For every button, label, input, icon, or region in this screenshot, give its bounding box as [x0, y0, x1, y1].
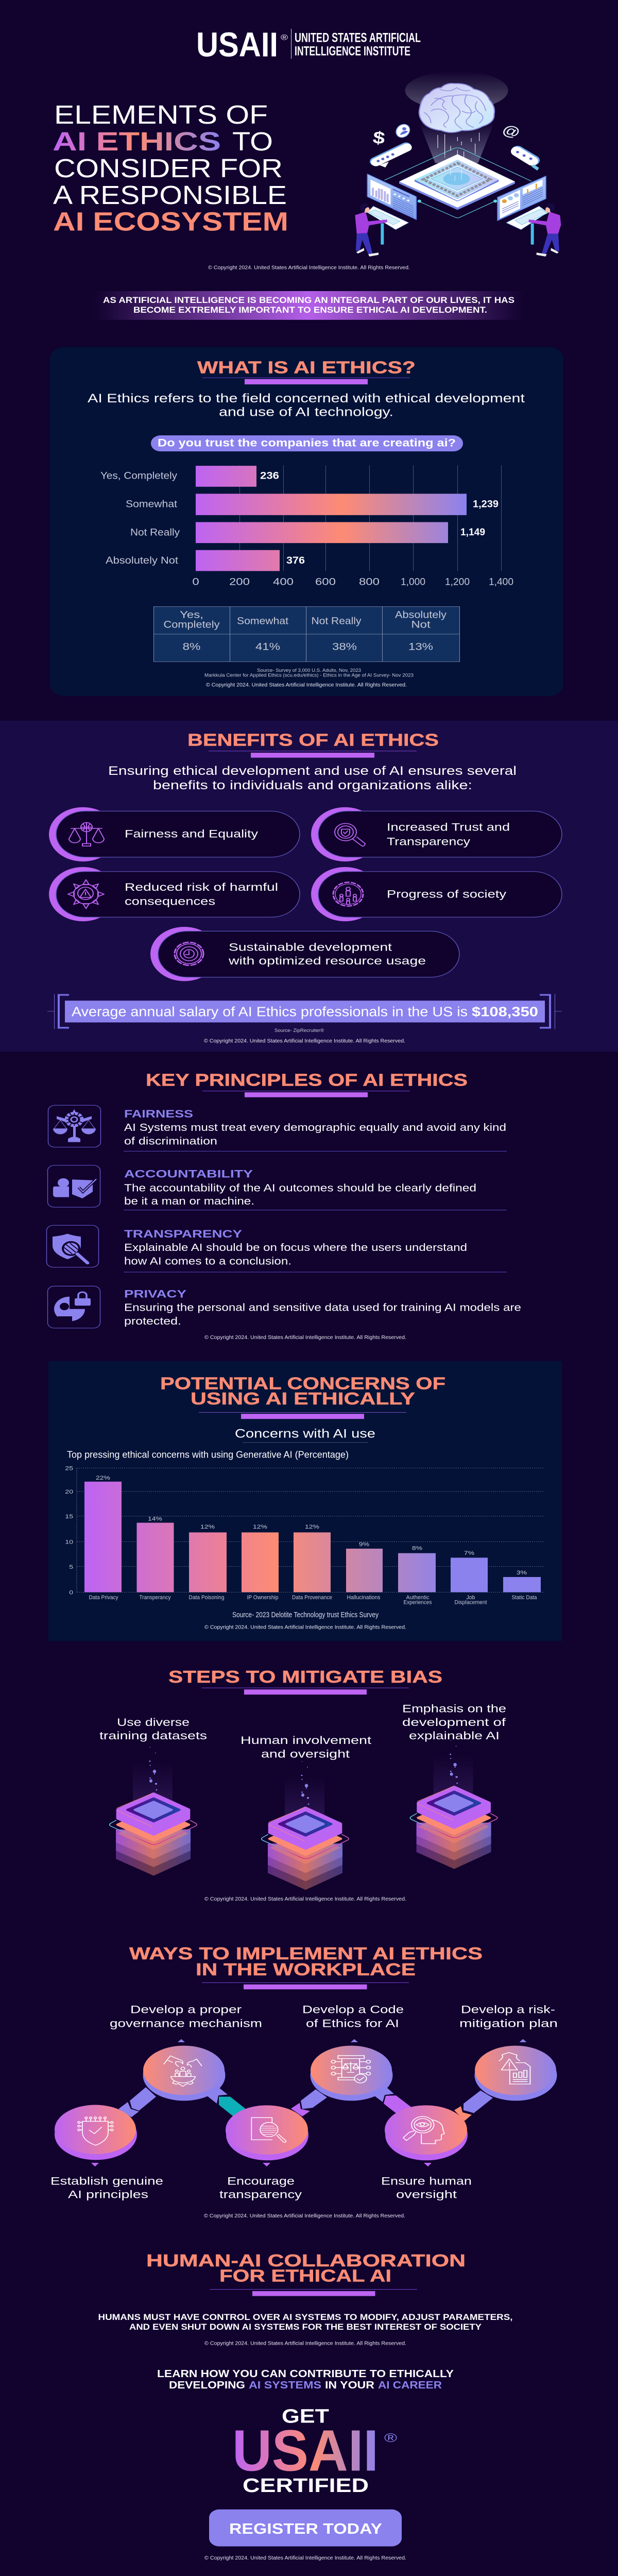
bar chart: Absolutely Not: [106, 554, 178, 566]
card: reduced risk of harmful consequences: consequences: [125, 895, 215, 908]
main title: [53, 100, 288, 236]
column chart: 14%: [148, 1516, 162, 1522]
step: develop a code of ethics for AI: Develop a Code: [302, 2004, 404, 2016]
body text: [98, 2313, 513, 2332]
salary callout: $108,350: [472, 1005, 538, 1020]
copyright: © Copyright 2024. United States Artificial Intelligence Institute. All Rights Reserved.: [204, 2341, 406, 2346]
bar chart: 0: [192, 576, 199, 587]
main title: TO: [232, 127, 273, 157]
step 3: explainable AI: [409, 1730, 500, 1742]
principle: transparency: [46, 1225, 507, 1273]
heading: IN THE WORKPLACE: [196, 1960, 416, 1979]
certification lockup: GET: [282, 2405, 329, 2427]
heading: POTENTIAL CONCERNS OF: [160, 1374, 445, 1393]
copyright: © Copyright 2024. United States Artificial Intelligence Institute. All Rights Reserved.: [204, 1038, 405, 1044]
card: fairness and equality: Fairness and Equality: [125, 828, 259, 840]
definition text: AI Ethics refers to the field concerned with ethical development: [88, 391, 525, 405]
card: increased trust and transparency: [311, 807, 562, 861]
logo: UNITED STATES ARTIFICIAL: [295, 30, 421, 45]
panel: benefits of AI ethics: [0, 721, 618, 1052]
column chart: 0: [69, 1589, 73, 1596]
step: ensure human oversight: Ensure human: [381, 2175, 472, 2188]
column chart: 12%: [253, 1523, 267, 1530]
column chart: Job: [467, 1594, 475, 1601]
principle: privacy: Ensuring the personal and sensitive data used for training AI models are: [124, 1302, 521, 1313]
certification lockup: ®: [384, 2431, 397, 2445]
intro banner: BECOME EXTREMELY IMPORTANT TO ENSURE ETHICAL AI DEVELOPMENT.: [133, 306, 487, 315]
heading: KEY PRINCIPLES OF AI ETHICS: [146, 1071, 468, 1090]
heading: WAYS TO IMPLEMENT AI ETHICS: [129, 1944, 483, 1963]
percentage table: 13%: [408, 641, 433, 652]
card: increased trust and transparency: Transparency: [387, 836, 471, 848]
card: sustainable development: with optimized resource usage: [228, 955, 426, 967]
certification lockup: [232, 2405, 397, 2497]
card: reduced risk of harmful consequences: [49, 867, 300, 921]
panel: what is AI ethics: [50, 347, 563, 696]
step: ensure human oversight: [381, 2105, 472, 2201]
column chart: 10: [65, 1539, 73, 1545]
logo: ®: [281, 33, 288, 42]
heading: BENEFITS OF AI ETHICS: [187, 731, 439, 750]
copyright: © Copyright 2024. United States Artificial Intelligence Institute. All Rights Reserved.: [208, 265, 410, 270]
circuit lines: [385, 148, 531, 218]
bar chart: 800: [359, 576, 380, 587]
step: ensure human oversight: oversight: [396, 2189, 457, 2201]
percentage table: Absolutely: [395, 609, 447, 620]
bar chart: 1,239: [473, 498, 499, 510]
step: develop a code of ethics for AI: of Ethics for AI: [306, 2018, 399, 2030]
icon: right monitor: [497, 176, 546, 221]
column chart: Experiences: [404, 1599, 432, 1605]
step: develop a proper governance mechanism: [110, 2004, 262, 2101]
column chart: 7%: [464, 1550, 474, 1556]
column chart: Data Privacy: [89, 1594, 118, 1601]
intro banner: AS ARTIFICIAL INTELLIGENCE IS BECOMING AN INTEGRAL PART OF OUR LIVES, IT HAS: [103, 296, 514, 306]
step: encourage transparency: [219, 2105, 308, 2201]
column chart: 5: [69, 1564, 73, 1570]
column chart: Transperancy: [139, 1594, 171, 1601]
icon: code of ethics: [331, 2056, 370, 2083]
column chart: 15: [65, 1513, 73, 1520]
bar chart: 376: [286, 554, 305, 566]
copyright: © Copyright 2024. United States Artificial Intelligence Institute. All Rights Reserved.: [204, 2213, 405, 2219]
column chart: 8%: [412, 1545, 422, 1551]
percentage table: 38%: [332, 641, 357, 652]
icon: brain: [419, 83, 494, 132]
heading: STEPS TO MITIGATE BIAS: [168, 1668, 442, 1687]
heading: [160, 1374, 445, 1419]
principle: privacy: [47, 1286, 521, 1328]
card: fairness and equality: [49, 807, 300, 861]
step: develop a proper governance mechanism: Develop a proper: [130, 2004, 242, 2016]
bar chart: 1,000: [401, 576, 425, 587]
register button: REGISTER TODAY: [229, 2520, 382, 2537]
heading: [146, 2251, 466, 2296]
column chart: Authentic: [406, 1594, 430, 1601]
percentage table: Not Really: [311, 615, 362, 626]
icon: gear with people: [333, 882, 363, 906]
copyright: © Copyright 2024. United States Artificial Intelligence Institute. All Rights Reserved.: [204, 2555, 406, 2561]
percentage table: Not: [411, 619, 431, 630]
icon: dollar, user, at, speech bubbles: @: [500, 122, 523, 141]
copyright: © Copyright 2024. United States Artificial Intelligence Institute. All Rights Reserved.: [204, 1334, 406, 1341]
call to action text: LEARN HOW YOU CAN CONTRIBUTE TO ETHICALLY: [157, 2367, 454, 2379]
icon: dollar, user, at, speech bubbles: $: [372, 128, 386, 148]
percentage table: 8%: [183, 641, 200, 652]
principle: fairness: [48, 1105, 507, 1151]
step 2: Human involvement: [241, 1734, 371, 1747]
intro text: [108, 764, 517, 792]
source note: Source- ZipRecruiter®: [274, 1028, 324, 1033]
column chart: Static Data: [512, 1594, 537, 1601]
panel: human-AI collaboration: [98, 2251, 513, 2346]
percentage table: Completely: [164, 619, 220, 630]
percentage table: [153, 606, 459, 662]
column chart: Data Provenance: [292, 1594, 332, 1601]
bar chart: Not Really: [130, 527, 180, 538]
principle: transparency: Explainable AI should be on focus where the users understand: [124, 1242, 467, 1253]
icon: left operator and desk: [355, 203, 408, 257]
heading: FOR ETHICAL AI: [219, 2267, 391, 2286]
definition text: [88, 391, 525, 419]
card: progress of society: Progress of society: [387, 888, 507, 901]
bar chart: Somewhat: [126, 498, 177, 510]
body text: HUMANS MUST HAVE CONTROL OVER AI SYSTEMS TO MODIFY, ADJUST PARAMETERS,: [98, 2313, 513, 2322]
step 1: Use diverse: [117, 1716, 190, 1728]
bar chart: 236: [260, 470, 279, 481]
icon: user globe with lock: [54, 1292, 91, 1321]
step 3: Emphasis on the: [402, 1703, 506, 1715]
percentage table: 41%: [255, 641, 280, 652]
heading: WHAT IS AI ETHICS?: [197, 358, 416, 377]
step: develop a risk-mitigation plan: Develop a risk-: [461, 2004, 555, 2016]
principle: transparency: how AI comes to a conclusion.: [124, 1256, 291, 1267]
percentage table: Yes,: [180, 609, 203, 620]
panel: potential concerns: [48, 1361, 562, 1641]
principle: accountability: The accountability of the AI outcomes should be clearly defined: [124, 1182, 476, 1194]
survey question pill: Do you trust the companies that are creating ai?: [158, 437, 456, 449]
call to action text: AI SYSTEMS: [249, 2379, 321, 2391]
call to action text: IN YOUR: [325, 2379, 374, 2391]
principle: accountability: ACCOUNTABILITY: [124, 1168, 253, 1180]
heading: HUMAN-AI COLLABORATION: [146, 2251, 466, 2270]
source note: [204, 668, 414, 678]
principle: fairness: of discrimination: [124, 1136, 217, 1147]
icon: shield with magnifier: [53, 1234, 88, 1263]
icon: right operator and desk: [506, 203, 561, 257]
step 3: development of: [402, 1716, 506, 1728]
subheading: Concerns with AI use: [235, 1426, 375, 1440]
step 2: [241, 1734, 371, 1890]
column chart: 22%: [96, 1475, 110, 1481]
principle: accountability: be it a man or machine.: [124, 1195, 254, 1207]
heading: [129, 1944, 483, 1989]
icon: left monitor: [367, 174, 416, 219]
step: develop a proper governance mechanism: governance mechanism: [110, 2018, 262, 2030]
column chart: [65, 1465, 544, 1605]
definition text: and use of AI technology.: [219, 404, 393, 419]
icon: chip: [399, 154, 515, 210]
bar chart: 200: [229, 576, 250, 587]
icon: magnifier with shield: [335, 823, 365, 846]
card: sustainable development: [150, 927, 459, 981]
step: encourage transparency: transparency: [219, 2189, 302, 2201]
icon: risk document: [499, 2053, 530, 2084]
card: sustainable development: Sustainable development: [229, 941, 392, 954]
step 2: and oversight: [261, 1748, 350, 1760]
intro banner: [93, 291, 524, 320]
card: increased trust and transparency: Increased Trust and: [387, 821, 510, 834]
icon: warning hub: [68, 880, 104, 908]
main title: AI ETHICS: [53, 127, 221, 157]
column chart: 9%: [359, 1541, 369, 1548]
main title: ELEMENTS OF: [54, 100, 268, 130]
call to action text: DEVELOPING: [169, 2379, 245, 2391]
step: establish genuine AI principles: Establish genuine: [50, 2175, 163, 2188]
icon: person with shield: [53, 1178, 96, 1198]
intro text: Ensuring ethical development and use of AI ensures several: [108, 764, 517, 777]
icon: gear with clock: [175, 942, 203, 965]
percentage table: Somewhat: [237, 615, 288, 626]
call to action text: AI CAREER: [378, 2379, 442, 2391]
column chart: 25: [65, 1465, 73, 1471]
icon: shield circuit: [78, 2117, 113, 2145]
source note: Source- Survey of 3,000 U.S. Adults, Nov, 2023: [257, 668, 361, 673]
principle: privacy: PRIVACY: [124, 1288, 186, 1300]
main title: AI ECOSYSTEM: [53, 208, 288, 236]
card: progress of society: [311, 867, 562, 921]
principle: fairness: AI Systems must treat every demographic equally and avoid any kind: [124, 1122, 506, 1133]
call to action text: [157, 2367, 454, 2391]
main title: A RESPONSIBLE: [53, 181, 287, 210]
register button: [209, 2510, 402, 2547]
bar chart: 1,400: [489, 576, 513, 587]
certification lockup: USAII: [232, 2418, 379, 2483]
icon: governance: [164, 2056, 202, 2087]
step: establish genuine AI principles: AI principles: [68, 2189, 148, 2201]
step: encourage transparency: Encourage: [227, 2175, 295, 2188]
source note: Markkula Center for Applied Ethics (scu.edu/ethics) - Ethics in the Age of AI Survey- Nov 2023: [204, 673, 414, 678]
chart caption: Top pressing ethical concerns with using Generative AI (Percentage): [67, 1450, 349, 1460]
illustration: AI brain over chip with operators: [355, 71, 561, 257]
logo: USAII: [196, 25, 278, 64]
salary callout: Average annual salary of AI Ethics professionals in the US is: [72, 1005, 468, 1020]
bar chart: 1,200: [445, 576, 470, 587]
rain lines: [437, 132, 479, 170]
bar chart: 600: [315, 576, 336, 587]
bar chart: 1,149: [460, 526, 485, 537]
column chart: Displacement: [454, 1599, 487, 1605]
heading: USING AI ETHICALLY: [191, 1389, 415, 1409]
step 1: [99, 1716, 207, 1876]
principle: accountability: [47, 1165, 507, 1210]
step: develop a code of ethics for AI: [302, 2004, 404, 2101]
column chart: 12%: [200, 1523, 215, 1530]
step 3: [402, 1703, 506, 1869]
column chart: Data Poisoning: [188, 1594, 224, 1601]
principle: transparency: TRANSPARENCY: [124, 1228, 242, 1240]
principle: privacy: protected.: [124, 1315, 181, 1327]
copyright: © Copyright 2024. United States Artificial Intelligence Institute. All Rights Reserved.: [204, 1624, 406, 1630]
intro text: benefits to individuals and organizations alike:: [153, 778, 472, 792]
bar chart: 400: [273, 576, 294, 587]
step 1: training datasets: [99, 1730, 207, 1742]
column chart: 12%: [305, 1523, 319, 1530]
column chart: 3%: [517, 1569, 527, 1576]
icon: dollar, user, at, speech bubbles: [372, 122, 539, 171]
icon: scales with globe: [69, 823, 104, 846]
principle: fairness: FAIRNESS: [124, 1108, 193, 1120]
step: develop a risk-mitigation plan: mitigation plan: [459, 2018, 558, 2030]
certification lockup: CERTIFIED: [243, 2475, 369, 2497]
icon: balance gear: [53, 1109, 96, 1142]
body text: AND EVEN SHUT DOWN AI SYSTEMS FOR THE BEST INTEREST OF SOCIETY: [129, 2323, 482, 2332]
column chart: IP Ownership: [247, 1594, 279, 1601]
panel: key principles: [46, 1071, 521, 1341]
connectors: [118, 2087, 493, 2121]
copyright: © Copyright 2024. United States Artificial Intelligence Institute. All Rights Reserved.: [204, 1896, 406, 1902]
main title: CONSIDER FOR: [54, 154, 283, 183]
logo: INTELLIGENCE INSTITUTE: [295, 44, 410, 58]
panel: ways to implement: [50, 1944, 558, 2219]
icon: head with magnifier: [403, 2116, 444, 2144]
logo: [196, 25, 421, 64]
step: establish genuine AI principles: [50, 2105, 163, 2201]
icon: document magnifier: [251, 2117, 286, 2142]
bar chart: [100, 465, 513, 587]
column chart: 20: [65, 1488, 73, 1495]
column chart: Hallucinations: [347, 1594, 380, 1601]
copyright: © Copyright 2024. United States Artificial Intelligence Institute. All Rights Reserved.: [206, 682, 407, 688]
bar chart: Yes, Completely: [100, 470, 177, 481]
panel: steps to mitigate bias: [99, 1668, 506, 1902]
salary callout: [47, 994, 562, 1029]
source note: Source- 2023 Delotite Technology trust Ethics Survey: [232, 1611, 379, 1619]
step: develop a risk-mitigation plan: [459, 2004, 558, 2101]
card: reduced risk of harmful consequences: Reduced risk of harmful: [125, 882, 278, 893]
